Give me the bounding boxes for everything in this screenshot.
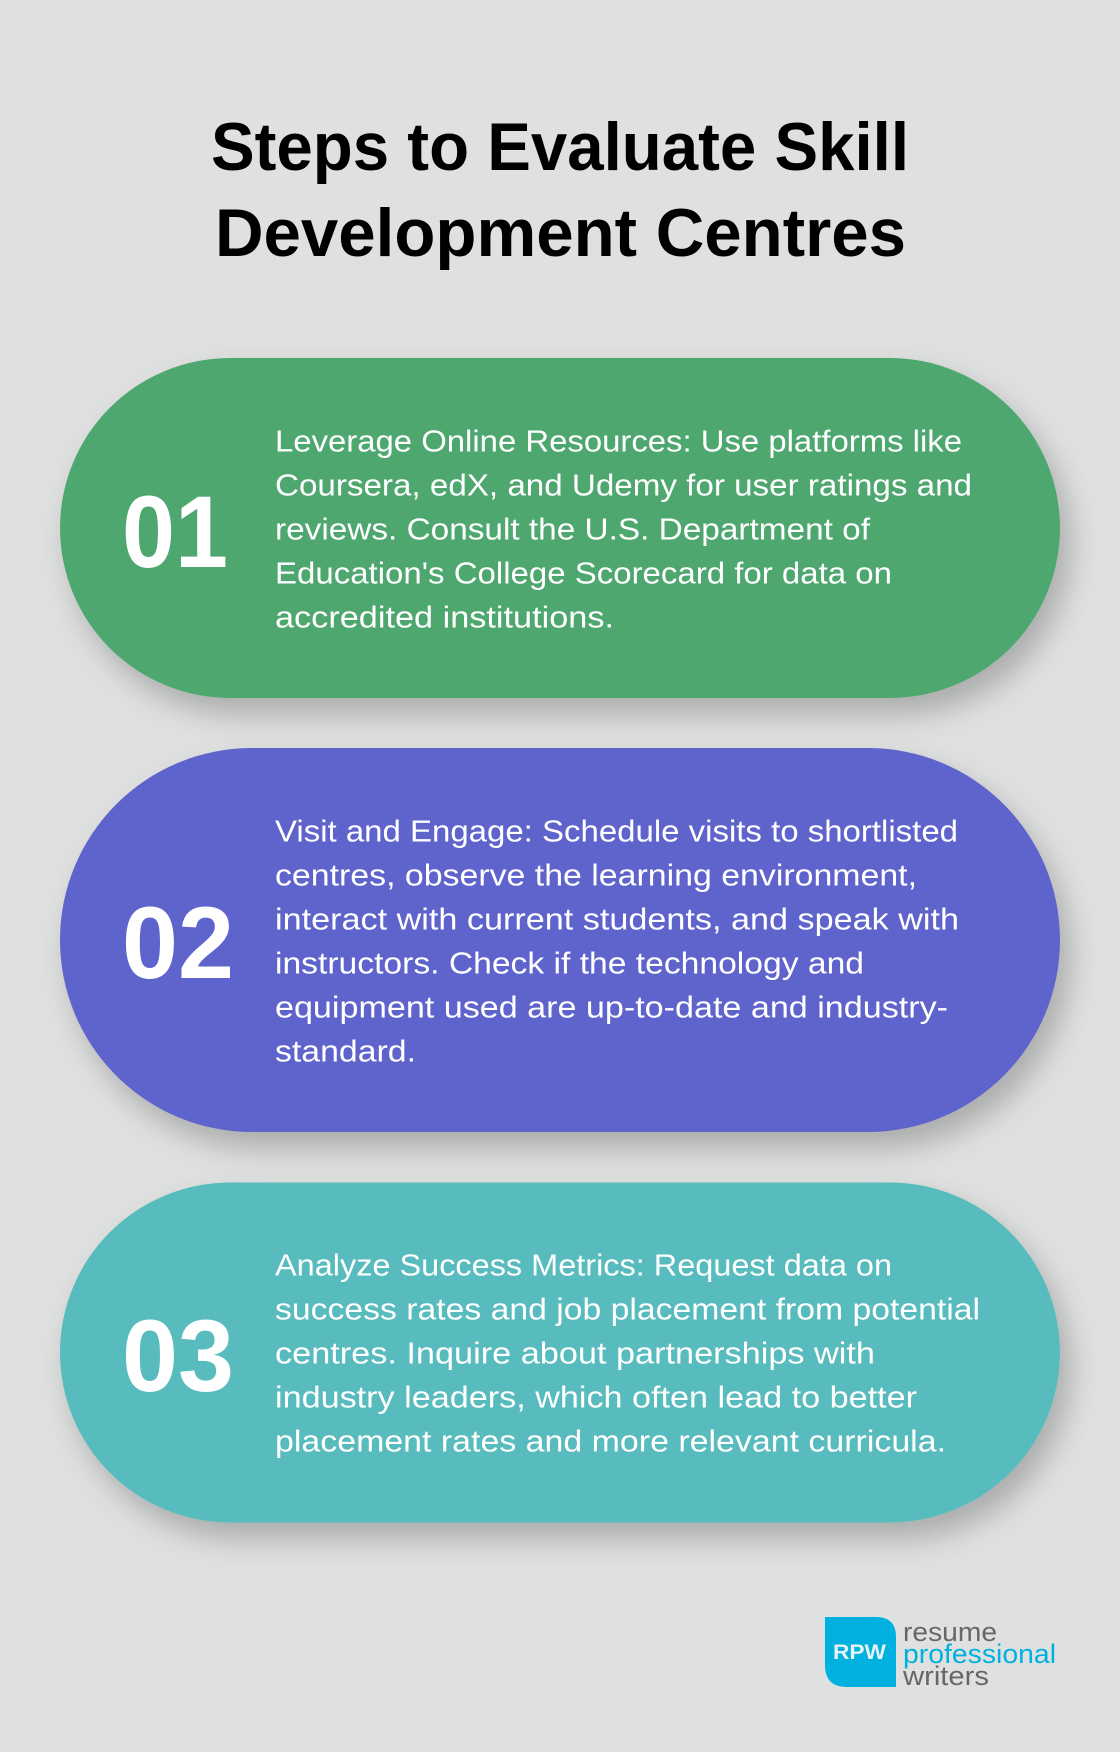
step 03 text: Analyze Success Metrics: Request data on bbox=[275, 1248, 892, 1282]
step 01 text: Education's College Scorecard for data on bbox=[275, 556, 892, 590]
logo: resume professional writers bbox=[825, 1617, 1056, 1691]
title bbox=[211, 109, 909, 271]
panel: step 03 bbox=[60, 1182, 1060, 1522]
step number 01: 01 bbox=[122, 475, 228, 589]
step 02 text: Visit and Engage: Schedule visits to shortlisted bbox=[275, 814, 958, 848]
pill background: purple bbox=[60, 748, 1060, 1132]
logo mark: RPW badge: RPW bbox=[833, 1641, 886, 1664]
step 03 text bbox=[275, 1248, 980, 1458]
step number 02: 02 bbox=[122, 886, 234, 1000]
step 03 text: centres. Inquire about partnerships with bbox=[275, 1336, 875, 1370]
step 03 text: success rates and job placement from potential bbox=[275, 1292, 980, 1326]
step 02 text bbox=[275, 814, 959, 1068]
title: Development Centres bbox=[215, 195, 906, 271]
pill background: teal bbox=[60, 1182, 1060, 1522]
step 01 text: Coursera, edX, and Udemy for user ratings and bbox=[275, 468, 972, 502]
step 02 text: equipment used are up-to-date and industry- bbox=[275, 990, 948, 1024]
title: Steps to Evaluate Skill bbox=[211, 109, 909, 185]
step 01 text bbox=[275, 424, 972, 634]
step 03 text: industry leaders, which often lead to better bbox=[275, 1380, 917, 1414]
step 03 text: placement rates and more relevant curricula. bbox=[275, 1424, 946, 1458]
step 01 text: reviews. Consult the U.S. Department of bbox=[275, 512, 870, 546]
step 02 text: instructors. Check if the technology and bbox=[275, 946, 864, 980]
pill background: green bbox=[60, 358, 1060, 698]
panel: step 02 bbox=[60, 748, 1060, 1132]
logo wordmark: resume bbox=[903, 1617, 997, 1647]
step 02 text: interact with current students, and speak with bbox=[275, 902, 959, 936]
panel: step 01 bbox=[60, 358, 1060, 698]
logo wordmark: writers bbox=[902, 1661, 989, 1691]
logo wordmark bbox=[902, 1617, 1056, 1691]
step 01 text: accredited institutions. bbox=[275, 600, 614, 634]
logo wordmark: professional bbox=[903, 1639, 1056, 1669]
step 02 text: centres, observe the learning environment, bbox=[275, 858, 917, 892]
step 01 text: Leverage Online Resources: Use platforms like bbox=[275, 424, 962, 458]
logo mark: RPW badge bbox=[825, 1617, 896, 1687]
step 02 text: standard. bbox=[275, 1034, 416, 1068]
step number 03: 03 bbox=[122, 1299, 234, 1413]
